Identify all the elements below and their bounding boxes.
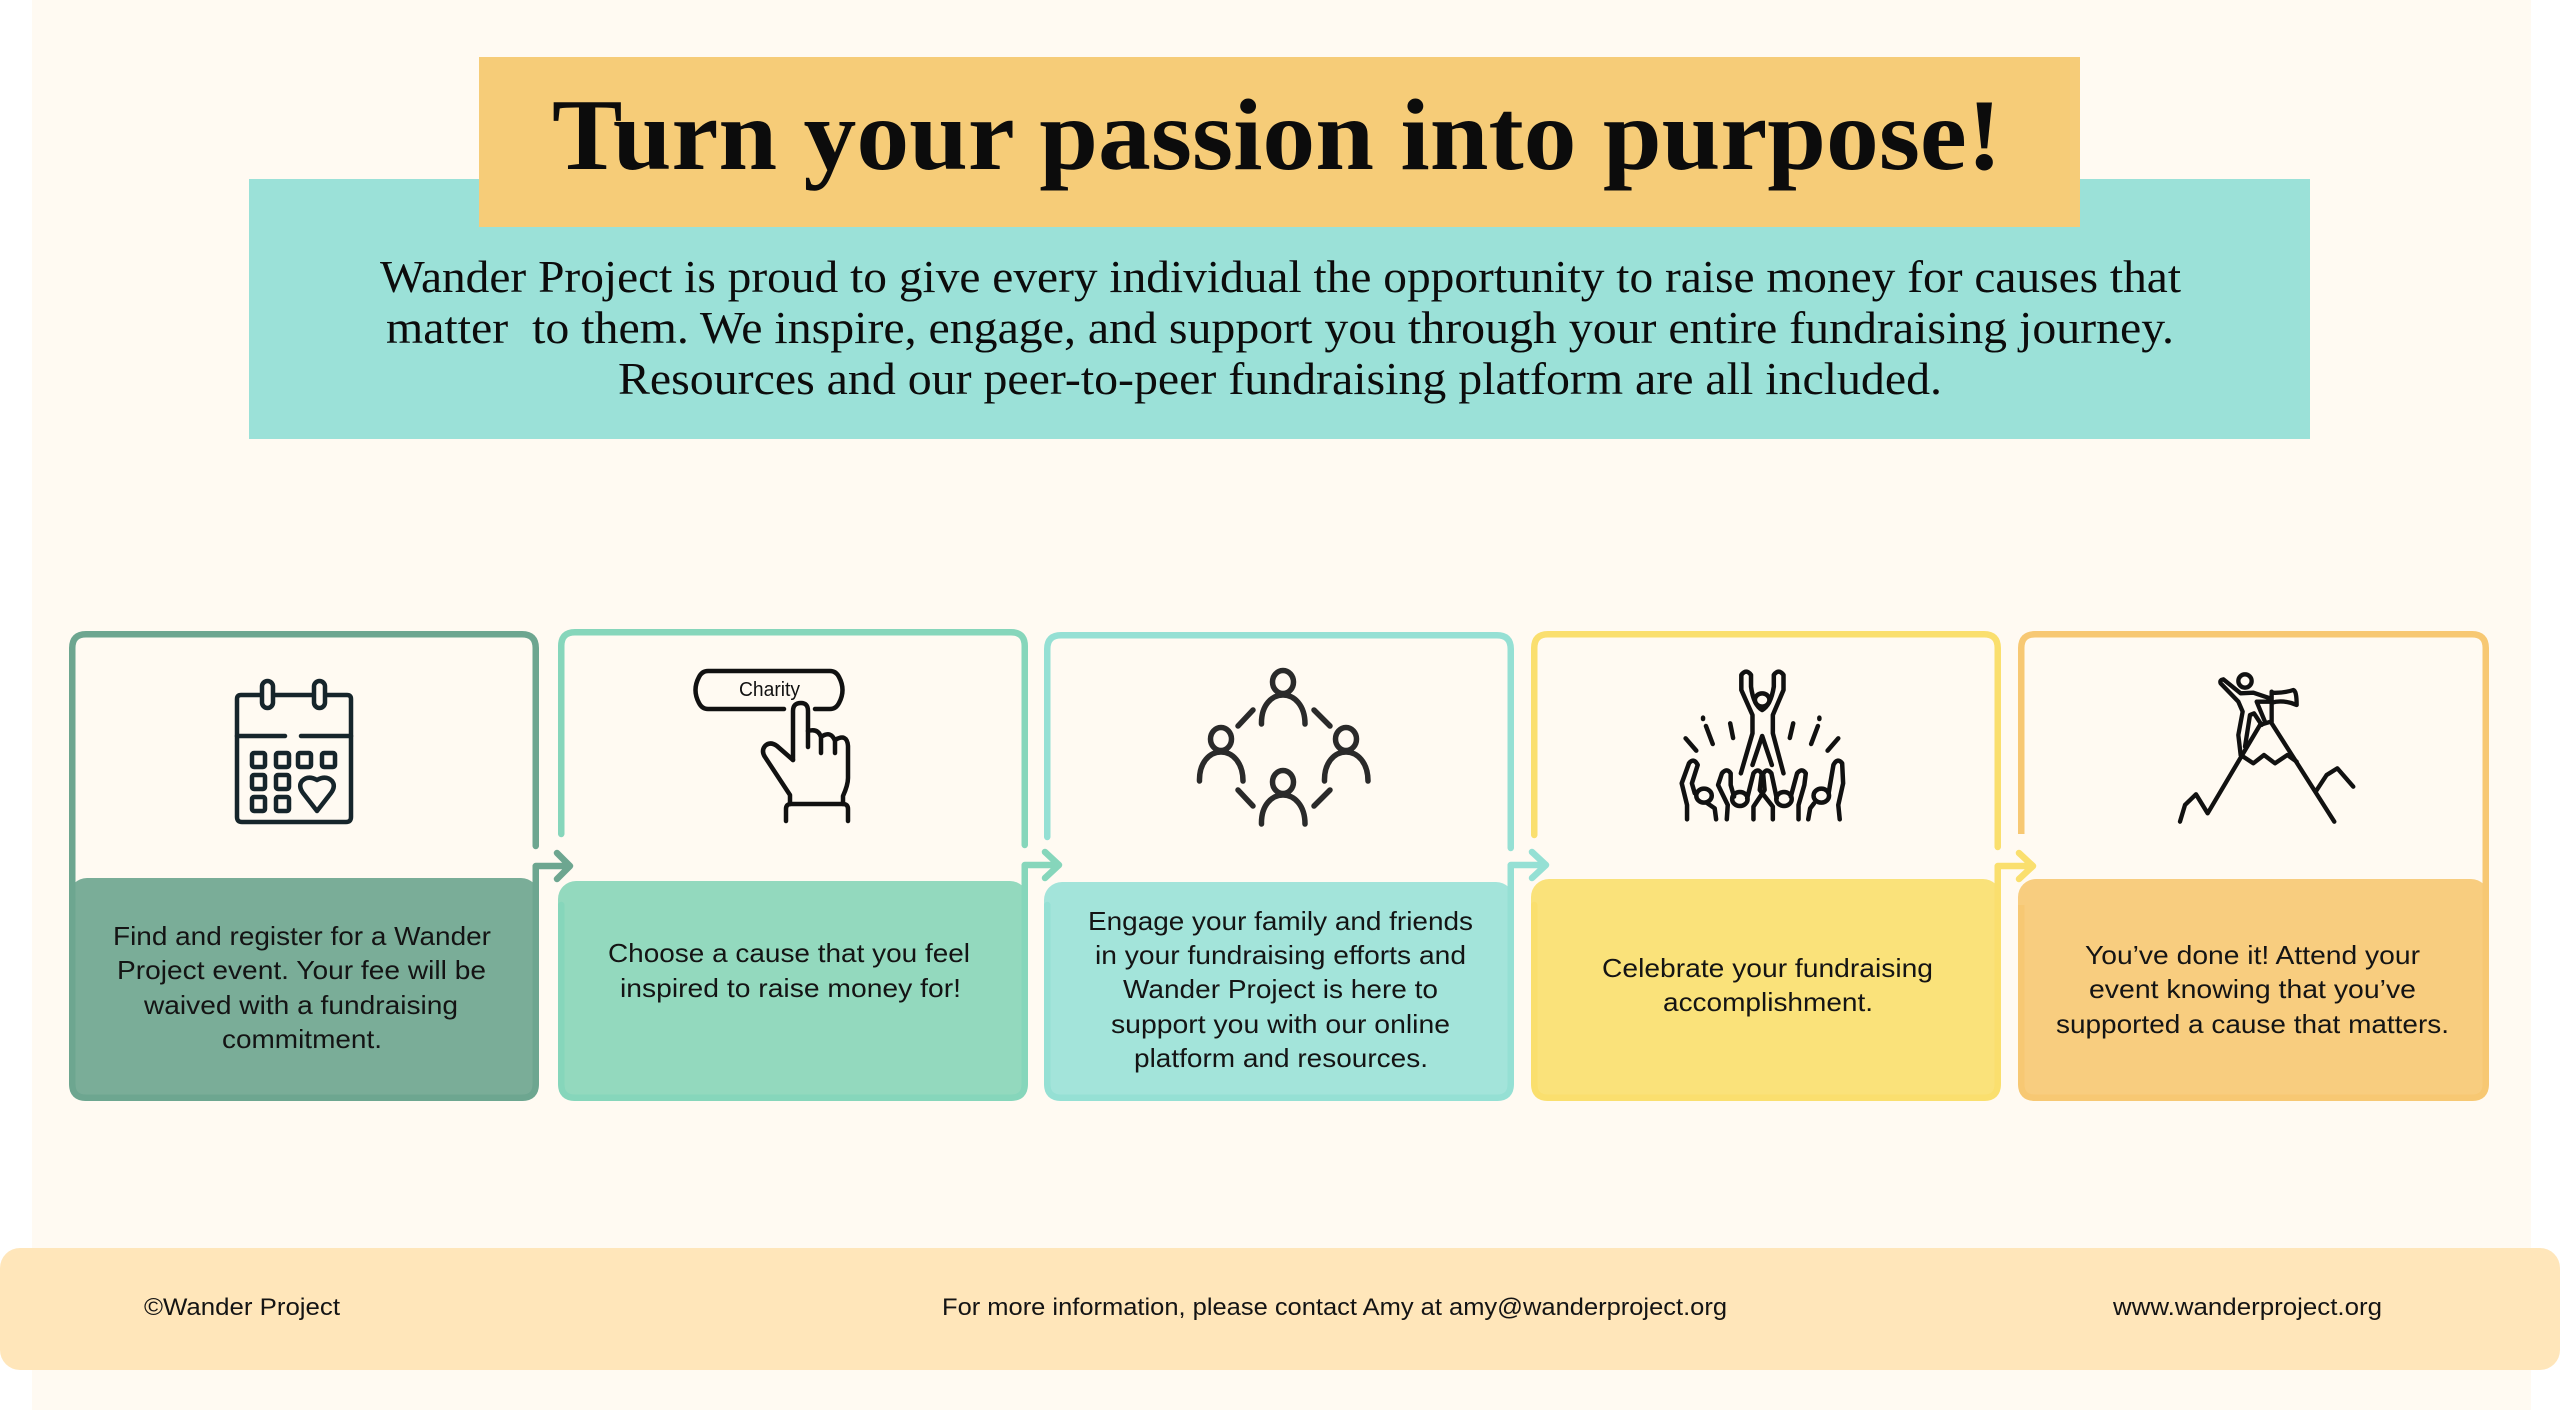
footer bar: For more information, please contact Amy at amy@wanderproject.org: [942, 1294, 1727, 1321]
footer bar: [0, 1248, 2560, 1370]
panel: step 3 engage family and friends: [1044, 635, 1546, 1101]
icon: network of people: [1199, 670, 1368, 824]
step 5 text: You’ve done it! Attend your: [2085, 940, 2420, 970]
panel: intro description: matter to them. We inspire, engage, and support you through your entire fundraising journey.: [386, 302, 2174, 353]
title banner: Turn your passion into purpose!: [552, 79, 2002, 192]
step 3 text: [1088, 906, 1473, 1073]
step 5 text: supported a cause that matters.: [2056, 1009, 2449, 1039]
step 3 text: in your fundraising efforts and: [1095, 940, 1466, 970]
step 1 text: [113, 921, 491, 1054]
step 1 text: Project event. Your fee will be: [117, 955, 486, 985]
step 5 text: [2056, 940, 2449, 1039]
icon: hand pressing charity button: Charity: [739, 679, 800, 701]
step 3 text: platform and resources.: [1134, 1043, 1428, 1073]
step 2 text: inspired to raise money for!: [620, 973, 961, 1003]
step 4 text: [1602, 953, 1933, 1017]
step 5 text: event knowing that you’ve: [2089, 974, 2416, 1004]
panel: step 4 celebrate: [1531, 634, 2033, 1101]
panel: intro description: Wander Project is proud to give every individual the opportunity to raise money for causes that: [380, 251, 2181, 302]
panel: intro description: Resources and our peer-to-peer fundraising platform are all included.: [618, 353, 1942, 404]
step 1 text: Find and register for a Wander: [113, 921, 491, 951]
footer bar: www.wanderproject.org: [2112, 1294, 2382, 1321]
step 3 text: Wander Project is here to: [1123, 974, 1438, 1004]
step 4 text: accomplishment.: [1663, 987, 1873, 1017]
icon: climber with flag on mountain: [2180, 674, 2353, 822]
step 3 text: support you with our online: [1111, 1009, 1450, 1039]
icon: calendar with heart: [237, 681, 351, 822]
panel: step 1 register: [69, 634, 570, 1101]
panel: intro description: [249, 179, 2310, 439]
title banner: [479, 57, 2080, 227]
footer bar: ©Wander Project: [144, 1294, 340, 1321]
step 3 text: Engage your family and friends: [1088, 906, 1473, 936]
step 1 text: waived with a fundraising: [143, 990, 458, 1020]
icon: cheering crowd: [1682, 672, 1843, 819]
step 4 text: Celebrate your fundraising: [1602, 953, 1933, 983]
step 2 text: Choose a cause that you feel: [608, 938, 970, 968]
step 1 text: commitment.: [222, 1024, 382, 1054]
panel: step 5 attend event: [2018, 634, 2489, 1101]
icon: hand pressing charity button: [696, 671, 848, 821]
panel: step 2 choose a cause: [558, 632, 1059, 1101]
step 2 text: [608, 938, 970, 1003]
